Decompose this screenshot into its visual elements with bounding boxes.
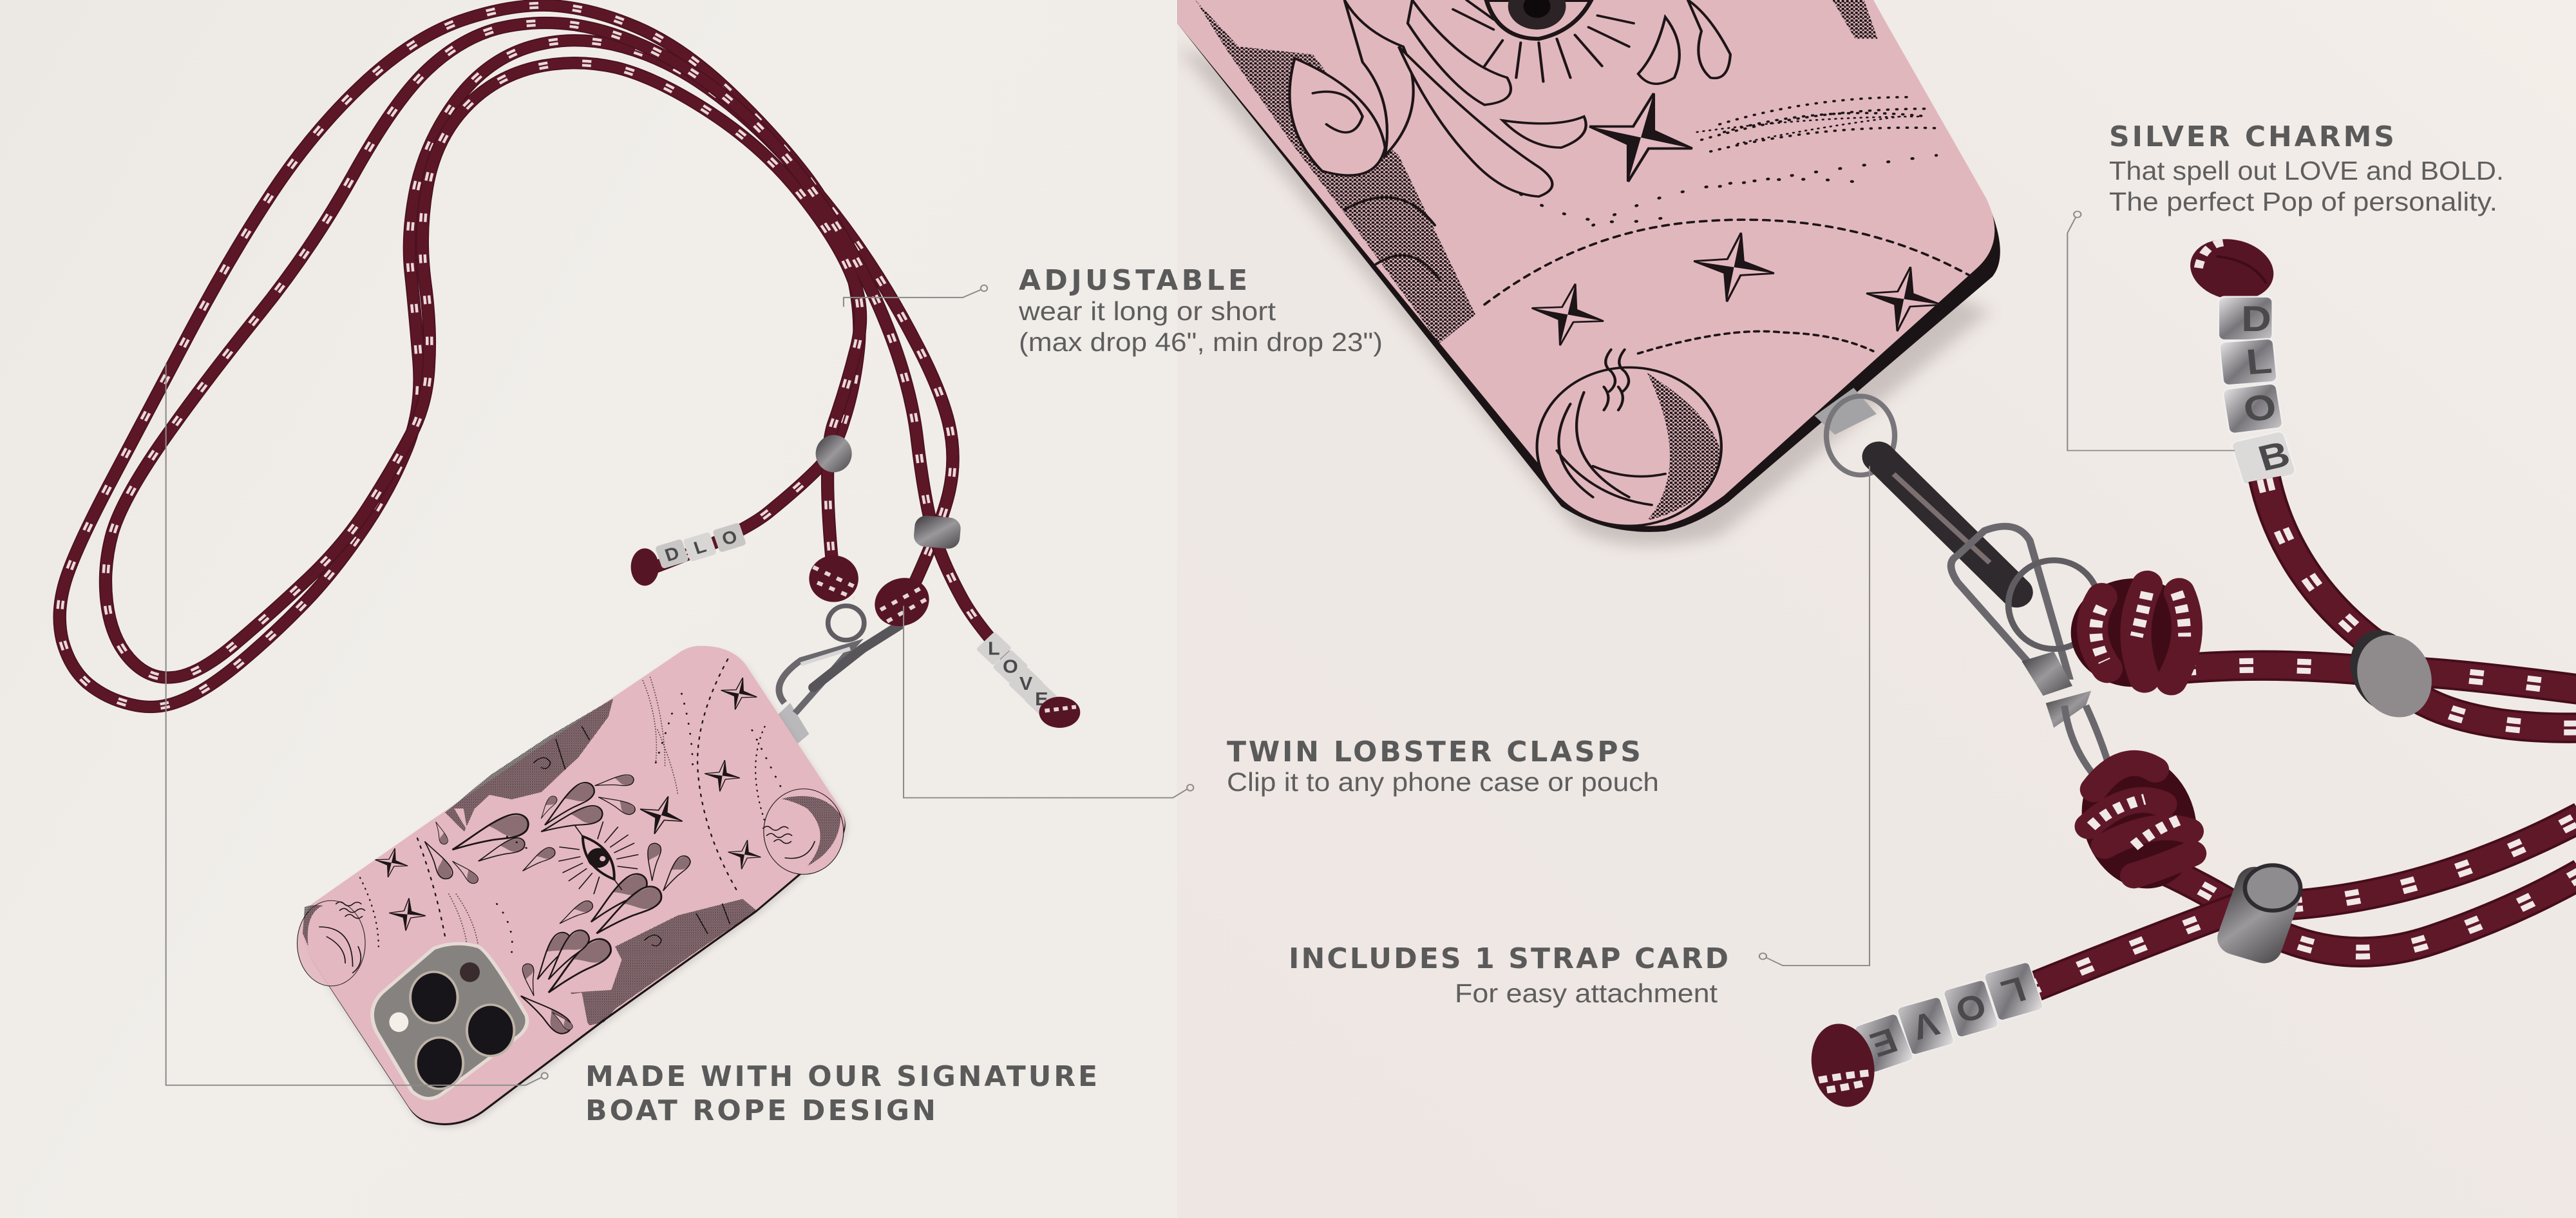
LOVE charm beads and knot: O [1003, 656, 1018, 677]
leader line: twin lobster clasps [904, 606, 1193, 798]
case connector tab and ring [1815, 388, 1895, 475]
leader line: adjustable [844, 285, 987, 307]
callout: adjustable: wear it long or short [1018, 296, 1276, 326]
BOLD charm knot [2190, 239, 2273, 298]
BOLD charm beads and knot [631, 522, 746, 585]
camera module [372, 944, 527, 1099]
close-up phone case [1177, 0, 2000, 532]
BOLD charm beads close-up: B [2253, 433, 2295, 479]
callout: signature boat rope design [585, 1060, 1097, 1127]
left knots [809, 555, 938, 635]
leader line: made with boat rope [166, 363, 548, 1085]
callout: twin lobster clasps [1227, 736, 1659, 797]
close-up planet [1537, 350, 1721, 526]
LOVE charm beads close-up: O [1951, 986, 1991, 1031]
callout: signature boat rope design: MADE WITH OUR SIGNATURE [585, 1060, 1097, 1093]
phone shadow [305, 651, 847, 1128]
close-up eye [1453, 0, 1634, 82]
right photo: close-up of phone and BOLD charm [1177, 0, 2297, 546]
close-up vase [1195, 0, 1878, 343]
artwork: lower vase [571, 899, 756, 1025]
BOLD charm beads close-up [2219, 297, 2297, 486]
LOVE charm beads close-up: E [1865, 1021, 1903, 1065]
callout: twin lobster clasps: TWIN LOBSTER CLASPS [1227, 736, 1641, 768]
artwork: dotted arcs and stardust [360, 659, 785, 953]
phone pink face [303, 646, 845, 1123]
callout: adjustable [1018, 264, 1383, 357]
LOVE charm beads and knot: L [988, 638, 1000, 659]
callout: silver charms: The perfect Pop of personality. [2109, 187, 2497, 216]
rope strap [60, 5, 1059, 710]
callout: adjustable: (max drop 46", min drop 23") [1019, 327, 1383, 357]
callout: includes strap card: For easy attachment [1455, 978, 1718, 1008]
close-up slider cylinder [2213, 862, 2306, 967]
artwork: eye [543, 808, 654, 908]
BOLD charm beads and knot: L [691, 536, 709, 558]
BOLD charm beads close-up: O [2240, 386, 2279, 430]
background: left photo [0, 0, 1179, 1218]
artwork: right planet [763, 789, 844, 874]
close-up upper knot [2071, 578, 2197, 687]
callout: silver charms: SILVER CHARMS [2109, 120, 2394, 153]
close-up ropes [2035, 479, 2576, 987]
close-up water drops [1345, 0, 1730, 196]
artwork: left planet [297, 900, 365, 986]
phone body [303, 648, 846, 1125]
leader line: silver charms [2067, 211, 2235, 450]
callout: silver charms: That spell out LOVE and BOLD. [2109, 156, 2504, 186]
close-up phone shadow [1177, 46, 1991, 546]
LOVE charm beads close-up: L [1996, 969, 2031, 1013]
artwork: water drops [422, 774, 693, 1038]
callout: includes strap card: INCLUDES 1 STRAP CARD [1289, 942, 1728, 975]
background: right photo [1177, 0, 2576, 1218]
callout: signature boat rope design: BOAT ROPE DESIGN [585, 1094, 936, 1127]
LOVE charm beads close-up: V [1908, 1004, 1944, 1047]
LOVE end knot [1804, 1019, 1881, 1112]
artwork: upper vase [445, 699, 613, 832]
BOLD charm beads close-up: D [2241, 299, 2271, 339]
callout: twin lobster clasps: Clip it to any phone case or pouch [1227, 767, 1659, 797]
left twin lobster clasp [774, 606, 900, 746]
close-up lower knot [2066, 743, 2212, 900]
left photo: rope strap with charms [60, 5, 1080, 746]
LOVE charm beads and knot: V [1019, 674, 1032, 694]
callout: silver charms [2109, 120, 2504, 216]
leader line: strap card [1759, 466, 1870, 966]
callout: includes strap card [1289, 942, 1728, 1008]
BOLD charm beads and knot: D [663, 543, 682, 566]
artwork: stars [372, 674, 764, 932]
LOVE charm beads and knot: E [1035, 689, 1048, 710]
right photo: lower strap close-up [1804, 388, 2576, 1112]
close-up stars [1524, 82, 1948, 352]
lobster clasp [1879, 457, 2112, 785]
BOLD charm beads and knot: O [719, 526, 740, 550]
LOVE charm beads and knot [976, 632, 1080, 728]
close-up slider disk [2339, 622, 2443, 727]
left sliders [816, 435, 961, 549]
LOVE charm beads close-up [1854, 962, 2044, 1073]
callout: adjustable: ADJUSTABLE [1019, 264, 1247, 297]
left photo: phone case [297, 646, 847, 1128]
close-up star dust and dotted arcs [1484, 97, 1977, 354]
BOLD charm beads close-up: L [2244, 341, 2274, 382]
